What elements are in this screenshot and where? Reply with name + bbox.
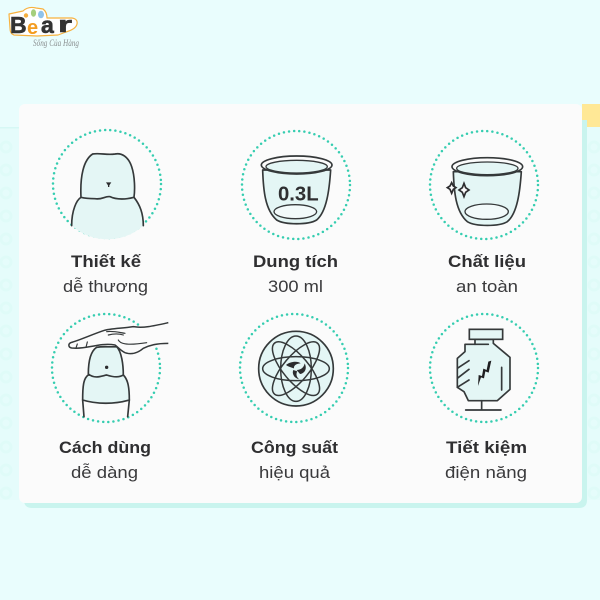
icon: atom fan bbox=[259, 331, 333, 406]
logo: Sống Của Hàng bbox=[33, 38, 79, 49]
logo: a bbox=[41, 12, 54, 38]
heading: Dung tích bbox=[253, 252, 338, 271]
logo: r bbox=[58, 12, 73, 37]
right pattern strip bbox=[582, 104, 600, 500]
heading: Tiết kiệm bbox=[446, 438, 527, 457]
logo bbox=[9, 7, 79, 49]
panel: card bbox=[19, 104, 582, 503]
icon: jar with sparkles bbox=[447, 158, 523, 225]
icon: hand pressing bottle bbox=[69, 323, 168, 417]
icon: bottle head bbox=[72, 154, 143, 239]
subheading: an toàn bbox=[456, 277, 518, 296]
panel: easy use bbox=[52, 314, 168, 482]
left pattern strip bbox=[0, 127, 20, 500]
dotted ring bbox=[53, 130, 161, 238]
dotted ring bbox=[242, 131, 350, 239]
dotted ring bbox=[430, 131, 538, 239]
icon: jar 0.3L bbox=[261, 156, 332, 224]
card shadow bbox=[24, 120, 587, 508]
panel: cute design bbox=[53, 130, 161, 296]
subheading: điện năng bbox=[445, 463, 527, 482]
icon: motor with bolt bbox=[457, 329, 510, 410]
logo: B bbox=[10, 12, 27, 38]
subheading: dễ thương bbox=[63, 277, 148, 296]
icon: jar 0.3L: 0.3L bbox=[278, 183, 319, 206]
panel: safe material bbox=[430, 131, 538, 296]
panel: efficient power bbox=[240, 314, 348, 482]
panel: energy saving bbox=[430, 314, 538, 482]
dotted ring bbox=[430, 314, 538, 422]
subheading: hiệu quả bbox=[259, 463, 331, 482]
heading: Chất liệu bbox=[448, 252, 526, 271]
heading: Cách dùng bbox=[59, 438, 151, 457]
dotted ring bbox=[240, 314, 348, 422]
heading: Công suất bbox=[251, 438, 338, 457]
logo: e bbox=[27, 17, 38, 39]
heading: Thiết kế bbox=[71, 252, 142, 271]
subheading: dễ dàng bbox=[71, 463, 138, 482]
dotted ring bbox=[52, 314, 160, 422]
panel: capacity bbox=[242, 131, 350, 296]
subheading: 300 ml bbox=[268, 277, 323, 296]
